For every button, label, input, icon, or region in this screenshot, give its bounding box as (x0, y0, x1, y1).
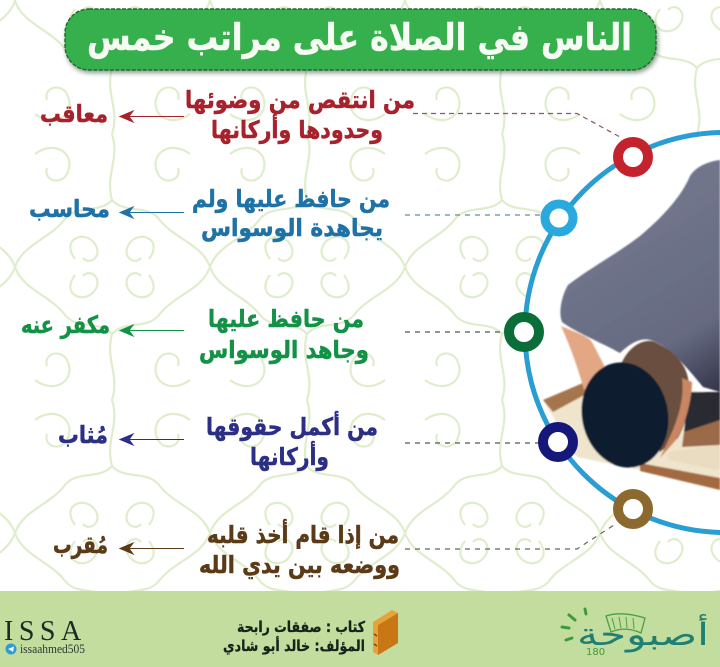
arrow (120, 543, 184, 554)
logo: asbuha (562, 609, 709, 658)
arrow (120, 207, 184, 218)
text: description: وجاهد الوسواس (199, 336, 369, 364)
text: description (185, 86, 415, 144)
icon: telegram (6, 644, 16, 654)
arm (561, 326, 607, 390)
node: light blue (545, 204, 573, 232)
dashed connector: light blue (405, 214, 541, 216)
row 5: brown (53, 519, 400, 579)
credit: issa: ISSA (4, 616, 87, 647)
title banner (65, 9, 658, 73)
text: description: من إذا قام أخذ قلبه (207, 519, 399, 549)
photo circle with praying man (525, 132, 720, 532)
text: description: من حافظ عليها ولم (192, 185, 390, 213)
label: مكفر عنه (21, 311, 110, 339)
title text: الناس في الصلاة على مراتب خمس (87, 16, 632, 59)
node: green (509, 317, 539, 347)
text: description: من انتقص من وضوئها (185, 86, 415, 114)
book credit text: المؤلف: خالد أبو شادي (223, 636, 365, 656)
text: description: من أكمل حقوقها (206, 411, 378, 441)
dashed connector: green (405, 331, 505, 333)
icon: book (373, 610, 398, 655)
row 1: red (40, 86, 415, 144)
arrow (120, 325, 184, 336)
text: description (206, 411, 378, 471)
row 2: blue (29, 185, 390, 242)
text: description (199, 305, 369, 364)
text: description: وحدودها وأركانها (211, 114, 383, 144)
text: description: وأركانها (250, 441, 329, 471)
node: navy (543, 427, 573, 457)
dashed connector: red (413, 114, 620, 137)
label: معاقب (40, 100, 108, 128)
dashed connector: navy (405, 442, 540, 444)
prayer rug (543, 383, 720, 490)
label: مُثاب (58, 421, 108, 449)
hair and face (622, 341, 690, 452)
footer band (0, 591, 720, 667)
text: description: ووضعه بين يدي الله (199, 551, 400, 579)
logo: asbuha: أصبوحة (577, 614, 709, 653)
text: description (192, 185, 390, 242)
row 3: green (21, 305, 369, 364)
book credit text: كتاب : صفقات رابحة (237, 618, 365, 636)
dashed connector: brown (405, 525, 614, 549)
row 4: navy (58, 411, 378, 471)
node: brown (618, 494, 648, 524)
node: red (618, 142, 648, 172)
shirt (560, 160, 720, 392)
arrow (120, 111, 184, 122)
blue ring (525, 132, 720, 532)
credit: issa: issaahmed505 (20, 642, 85, 656)
prayer cap (580, 361, 669, 469)
small book mark (606, 614, 645, 633)
text: description: يجاهدة الوسواس (201, 214, 383, 242)
sun rays (562, 609, 586, 640)
label: مُقرب (53, 531, 108, 559)
label: محاسب (29, 195, 110, 223)
arrow (120, 434, 184, 445)
text: description (199, 519, 400, 579)
book credit text (223, 618, 365, 656)
text: description: من حافظ عليها (208, 305, 364, 333)
number 180: 180 (586, 647, 605, 658)
